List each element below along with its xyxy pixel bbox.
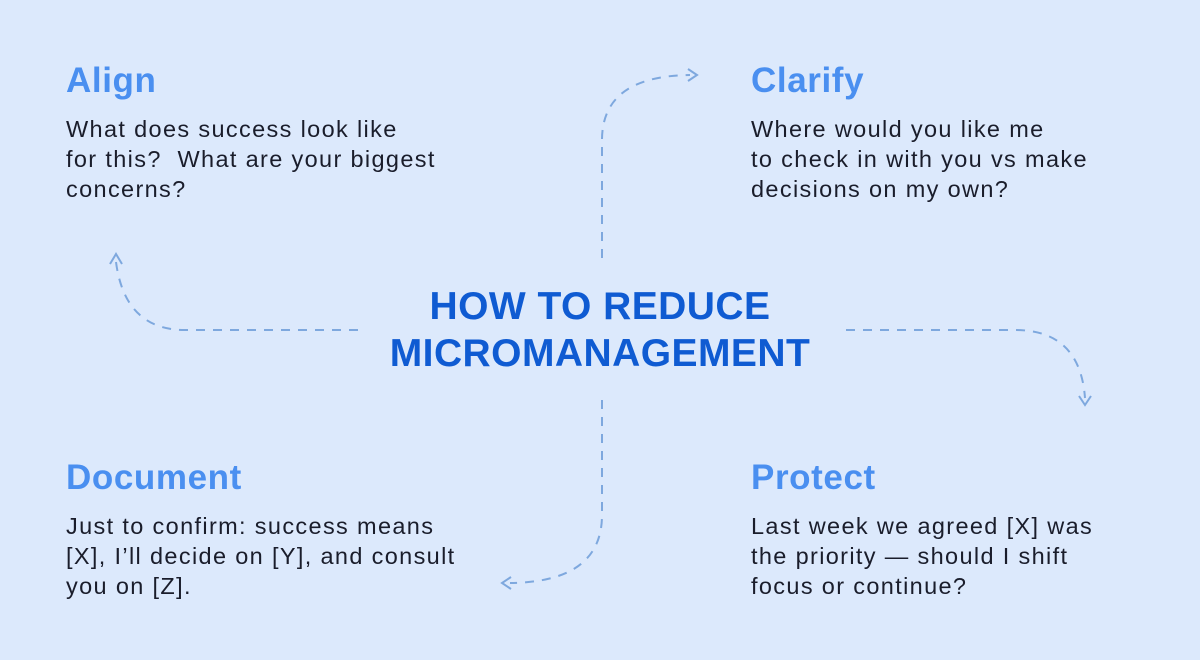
title — [390, 285, 810, 375]
text: Clarify: decisions on my own? — [751, 176, 1009, 202]
text: Align: What does success look like — [66, 116, 398, 142]
text: Document: Just to confirm: success means — [66, 513, 434, 539]
title: MICROMANAGEMENT — [390, 332, 810, 375]
text: Clarify — [751, 116, 1088, 202]
text: Document: you on [Z]. — [66, 573, 192, 599]
arrow: left — [110, 254, 358, 330]
text: Protect — [751, 513, 1093, 599]
text: Clarify: to check in with you vs make — [751, 146, 1088, 172]
arrow: top — [602, 69, 697, 258]
text: Align: for this? What are your biggest — [66, 146, 436, 172]
heading: Clarify: Clarify — [751, 61, 864, 100]
text: Clarify: Where would you like me — [751, 116, 1045, 142]
heading: Document: Document — [66, 458, 242, 497]
title: HOW TO REDUCE — [430, 285, 770, 328]
arrow: bottom — [502, 400, 602, 589]
heading: Align: Align — [66, 61, 156, 100]
text: Align — [66, 116, 436, 202]
text: Document — [66, 513, 456, 599]
arrow: right — [846, 330, 1091, 405]
heading: Protect: Protect — [751, 458, 876, 497]
text: Protect: focus or continue? — [751, 573, 967, 599]
text: Document: [X], I’ll decide on [Y], and consult — [66, 543, 456, 569]
text: Align: concerns? — [66, 176, 187, 202]
text: Protect: Last week we agreed [X] was — [751, 513, 1093, 539]
text: Protect: the priority — should I shift — [751, 543, 1068, 569]
